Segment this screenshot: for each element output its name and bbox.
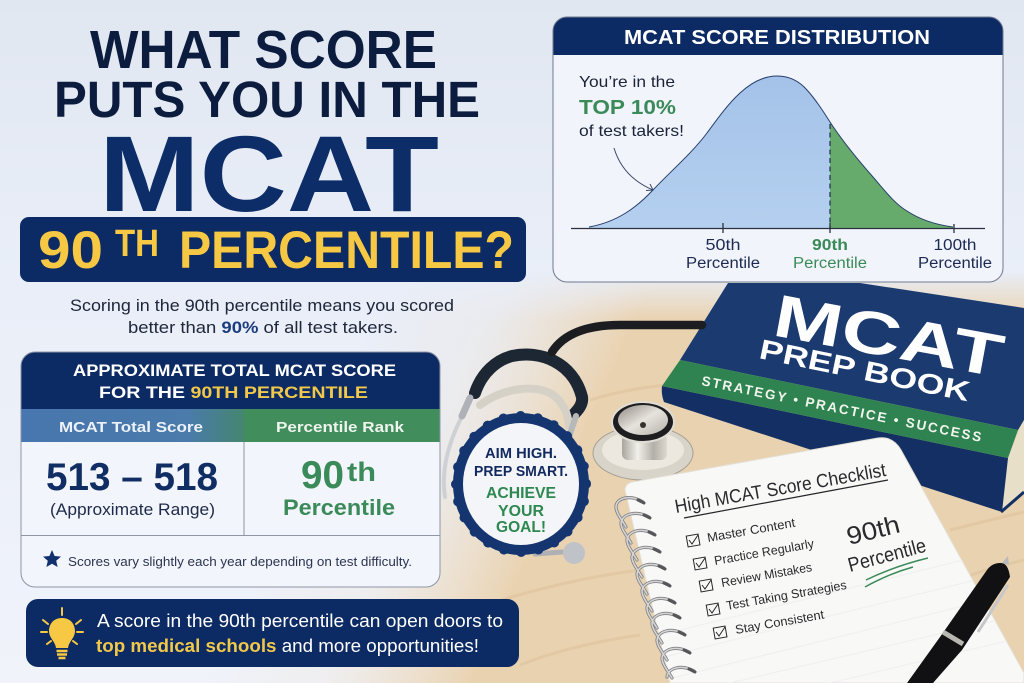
background [320, 278, 1024, 683]
callout: opportunity [26, 599, 519, 667]
callout: top 10%: TOP 10% [579, 97, 676, 119]
notebook heading: High MCAT Score Checklist [673, 460, 888, 518]
label: 100th [918, 237, 992, 272]
panel: score table [21, 352, 440, 587]
badge green text: GOAL! [496, 519, 546, 536]
callout text: top medical schools and more opportunities! [96, 636, 479, 656]
checklist: Practice Regularly [713, 537, 816, 568]
icon: star [43, 550, 61, 567]
stethoscope chest piece [593, 401, 693, 480]
spiral binding [616, 498, 695, 678]
label: 90th: 90th [812, 237, 848, 254]
label: 50th: Percentile [686, 255, 760, 272]
column heading: score: MCAT Total Score [59, 419, 203, 436]
subtitle: Scoring in the 90th percentile means you scored [70, 296, 454, 315]
arrow [614, 148, 653, 190]
icon: light bulb [41, 608, 83, 658]
title line 1: WHAT SCORE [90, 20, 437, 80]
stethoscope [444, 325, 702, 564]
checklist: Test Taking Strategies [725, 578, 848, 613]
checklist: Master Content [706, 516, 797, 545]
subtitle: better than 90% of all test takers. [128, 318, 398, 337]
checklist [686, 516, 848, 639]
book cover [680, 283, 1024, 430]
label: 100th: 100th [934, 237, 976, 254]
table footnote: Scores vary slightly each year depending on test difficulty. [68, 554, 412, 569]
title [54, 20, 480, 234]
book pages [1000, 418, 1024, 512]
banner: 90th percentile: TH [115, 223, 159, 265]
book strategy line: STRATEGY • PRACTICE • SUCCESS [700, 373, 983, 445]
banner: 90th percentile: PERCENTILE? [179, 221, 514, 280]
checklist: Review Mistakes [720, 560, 813, 590]
handwritten 90th percentile [844, 511, 929, 587]
label: 90th: Percentile [793, 255, 867, 272]
table heading: APPROXIMATE TOTAL MCAT SCORE [73, 361, 396, 380]
label: 90th [793, 237, 867, 272]
subtitle [70, 296, 454, 337]
chart heading: MCAT SCORE DISTRIBUTION [624, 26, 930, 49]
badge green text: YOUR [498, 503, 544, 520]
stethoscope ear tip [563, 542, 585, 564]
percentile value: 90 [301, 454, 344, 497]
column heading: rank: Percentile Rank [276, 419, 405, 436]
callout text [96, 611, 503, 656]
notebook [616, 438, 1024, 683]
badge green text [486, 485, 556, 536]
book green band [662, 360, 1018, 458]
label: 50th [686, 237, 760, 272]
percentile value [283, 454, 395, 520]
score range note: (Approximate Range) [50, 501, 215, 519]
book spine edge [662, 386, 1008, 512]
callout text: A score in the 90th percentile can open doors to [97, 611, 503, 631]
bell curve [589, 76, 953, 228]
handwritten 90th percentile: 90th [844, 511, 903, 551]
label: 100th: Percentile [918, 255, 992, 272]
badge navy text: AIM HIGH. [485, 446, 557, 462]
table heading [73, 361, 396, 402]
axis [571, 223, 985, 233]
badge navy text: PREP SMART. [474, 464, 568, 480]
badge green text: ACHIEVE [486, 485, 556, 502]
panel: score distribution chart [553, 17, 1003, 282]
score range: 513 – 518 [46, 456, 218, 499]
handwritten 90th percentile: Percentile [846, 535, 929, 577]
pen [907, 556, 1010, 683]
checklist: Stay Consistent [734, 607, 826, 637]
banner: 90th percentile [20, 217, 526, 282]
badge: aim high [453, 413, 589, 555]
percentile value: th [347, 457, 376, 487]
title line 2: PUTS YOU IN THE [54, 71, 480, 128]
badge navy text [474, 446, 568, 480]
callout: top 10%: of test takers! [579, 123, 684, 140]
book: MCAT prep book [662, 282, 1024, 512]
callout: top 10% [579, 74, 684, 140]
table heading: FOR THE 90TH PERCENTILE [99, 383, 368, 402]
book subtitle: PREP BOOK [757, 334, 973, 407]
banner: 90th percentile: 90 [38, 221, 103, 280]
callout: top 10%: You’re in the [579, 74, 675, 91]
label: 50th: 50th [706, 237, 740, 254]
book title: MCAT [769, 282, 1009, 390]
percentile value: Percentile [283, 495, 395, 520]
title MCAT: MCAT [99, 113, 439, 234]
